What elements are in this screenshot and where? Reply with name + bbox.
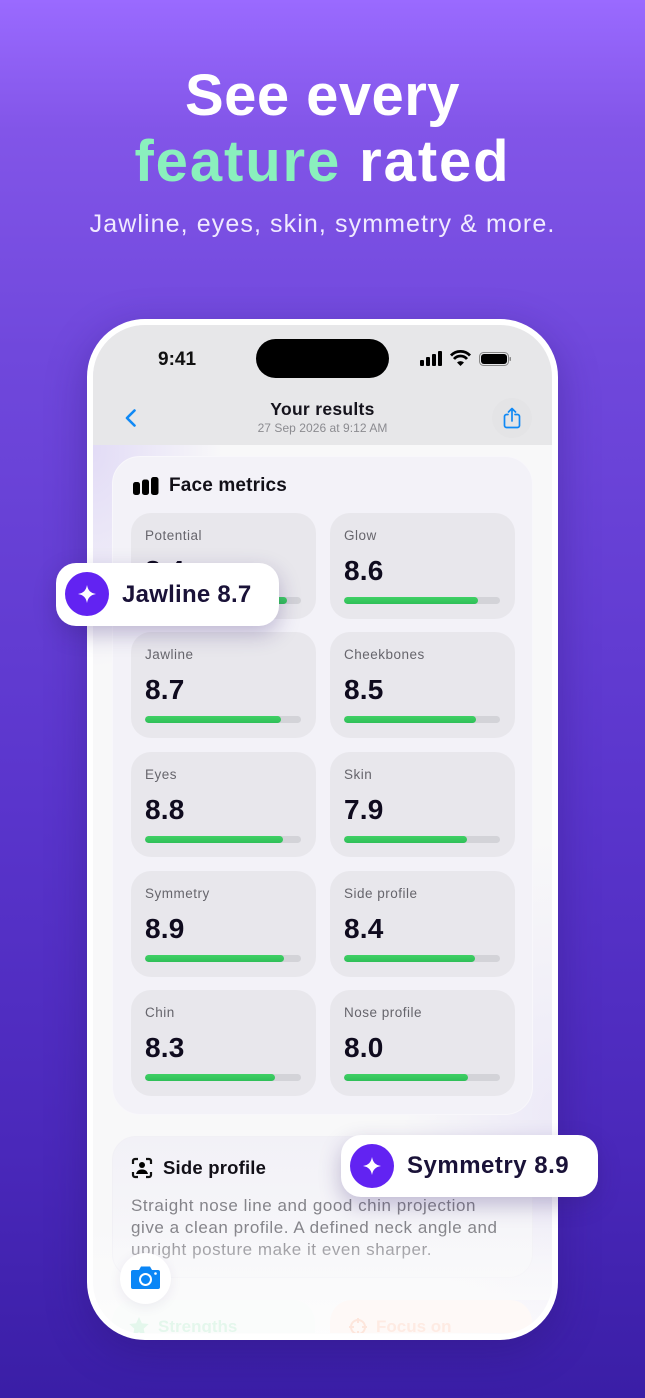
title: See every bbox=[185, 63, 460, 128]
focus on icon bbox=[349, 1318, 367, 1333]
metric: eyes bbox=[131, 752, 316, 857]
metric: potential: 8.4 bbox=[145, 555, 185, 586]
face metrics heading bbox=[133, 475, 287, 496]
fade over side profile text bbox=[93, 1230, 552, 1300]
metric: eyes: Eyes bbox=[145, 767, 177, 782]
callout text: Jawline 8.7 bbox=[122, 581, 252, 608]
side profile text: upright posture make it even sharper. bbox=[131, 1240, 432, 1259]
metric: side profile: Side profile bbox=[344, 886, 418, 901]
side profile heading: Side profile bbox=[163, 1157, 266, 1178]
subtitle: Jawline, eyes, skin, symmetry & more. bbox=[90, 210, 555, 238]
panel: side profile bbox=[112, 1136, 533, 1278]
metric: glow bbox=[330, 513, 515, 619]
metric: nose profile: Nose profile bbox=[344, 1005, 422, 1020]
status time: 9:41 bbox=[158, 349, 196, 370]
side profile icon bbox=[132, 1158, 152, 1178]
side profile text: Straight nose line and good chin projection bbox=[131, 1196, 476, 1215]
callout: jawline bbox=[56, 563, 279, 626]
metric: chin: Chin bbox=[145, 1005, 175, 1020]
metric: symmetry: Symmetry bbox=[145, 886, 210, 901]
metric: glow: 8.6 bbox=[344, 555, 384, 586]
metric: symmetry: 8.9 bbox=[145, 913, 185, 944]
metric: skin: Skin bbox=[344, 767, 372, 782]
back chevron bbox=[126, 409, 136, 427]
heading text: Face metrics bbox=[169, 475, 287, 496]
dynamic island bbox=[256, 339, 389, 378]
share button bbox=[504, 408, 520, 428]
panel: face metrics bbox=[112, 456, 533, 1115]
callout: symmetry bbox=[341, 1135, 598, 1197]
screen header bbox=[93, 325, 552, 445]
camera icon bbox=[131, 1266, 160, 1289]
metric: jawline: 8.7 bbox=[145, 674, 185, 705]
metric: side profile bbox=[330, 871, 515, 977]
metric: potential: Potential bbox=[145, 528, 202, 543]
metric: glow: Glow bbox=[344, 528, 377, 543]
metric: nose profile bbox=[330, 990, 515, 1096]
sparkle badge bbox=[350, 1144, 394, 1188]
metric: chin bbox=[131, 990, 316, 1096]
metric: cheekbones: Cheekbones bbox=[344, 647, 425, 662]
phone mockup bbox=[87, 319, 558, 1340]
callout text: Symmetry 8.9 bbox=[407, 1152, 569, 1179]
metric: jawline: Jawline bbox=[145, 647, 194, 662]
metric: eyes: 8.8 bbox=[145, 794, 185, 825]
metric: cheekbones bbox=[330, 632, 515, 738]
metric: cheekbones: 8.5 bbox=[344, 674, 384, 705]
title bbox=[134, 63, 511, 194]
sparkle badge bbox=[65, 572, 109, 616]
panel: strengths bbox=[112, 1300, 315, 1333]
metric: symmetry bbox=[131, 871, 316, 977]
metric: jawline bbox=[131, 632, 316, 738]
side profile text bbox=[131, 1196, 498, 1259]
nav title: Your results bbox=[270, 399, 375, 419]
metric: nose profile: 8.0 bbox=[344, 1032, 384, 1063]
metric: side profile: 8.4 bbox=[344, 913, 384, 944]
metric: chin: 8.3 bbox=[145, 1032, 185, 1063]
panel: focus on bbox=[330, 1300, 532, 1333]
metric: potential bbox=[131, 513, 316, 619]
status icons bbox=[420, 350, 511, 366]
side profile text: give a clean profile. A defined neck angle and bbox=[131, 1218, 498, 1237]
metric: skin: 7.9 bbox=[344, 794, 384, 825]
strengths star icon bbox=[130, 1318, 148, 1333]
title: feature rated bbox=[134, 129, 511, 194]
metric: skin bbox=[330, 752, 515, 857]
camera button bbox=[120, 1253, 171, 1304]
nav date: 27 Sep 2026 at 9:12 AM bbox=[258, 421, 387, 435]
bars icon bbox=[133, 477, 158, 495]
